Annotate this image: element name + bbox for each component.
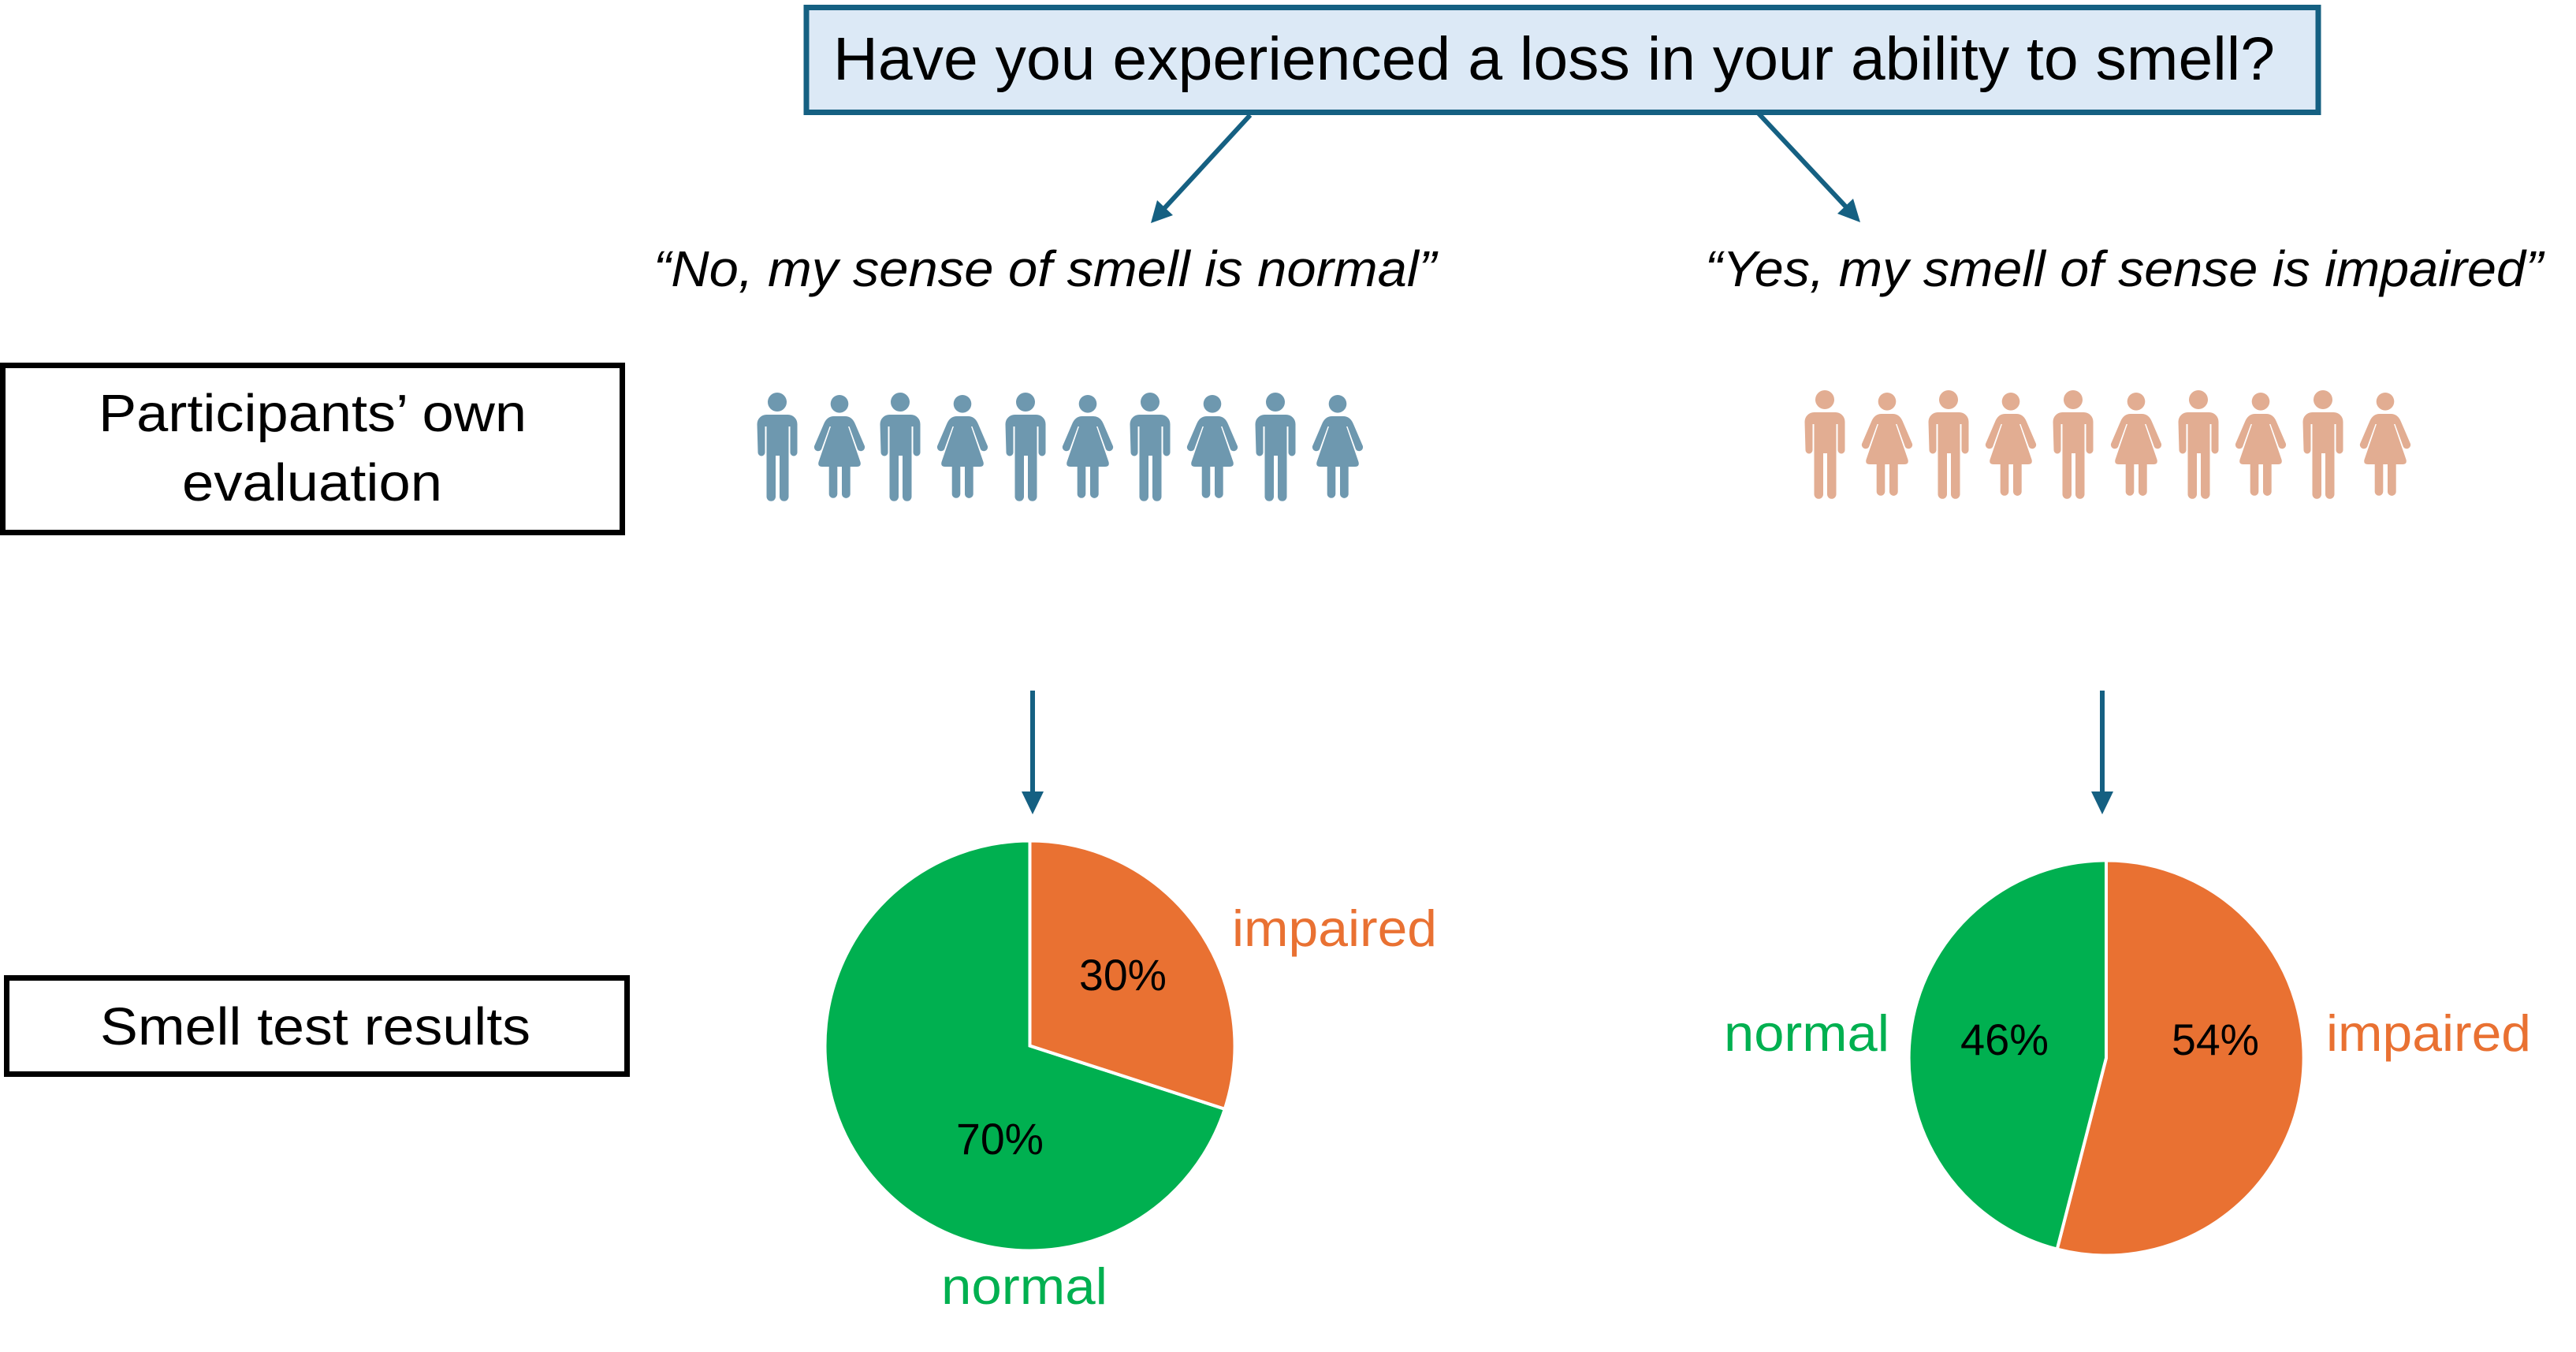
label: impaired: impaired [1232, 899, 1437, 957]
value: 54%: 54% [2172, 1015, 2259, 1064]
arrow: down to left pie [1022, 691, 1044, 814]
row label: participants' own evaluation [3, 366, 623, 533]
quote: yes, impaired: “Yes, my smell of sense is impaired” [1705, 240, 2545, 297]
row label: smell test results [6, 978, 627, 1074]
question box [806, 8, 2318, 112]
row label: participants' own evaluation: evaluation [182, 453, 442, 512]
arrow: question to "no" answer [1151, 115, 1250, 223]
label: impaired: impaired [2326, 1004, 2531, 1062]
value: 30%: 30% [1079, 950, 1167, 1000]
value: 70%: 70% [956, 1114, 1044, 1164]
question box: Have you experienced a loss in your ability to smell? [833, 25, 2275, 93]
label: normal: normal [1724, 1004, 1889, 1062]
row label: participants' own evaluation: Participants’ own [99, 384, 527, 443]
arrow: question to "yes" answer [1759, 114, 1860, 222]
row label: smell test results: Smell test results [100, 997, 530, 1056]
people icons: normal self-evaluation group [757, 393, 1363, 501]
people icons: impaired self-evaluation group [1805, 390, 2410, 499]
value: 46%: 46% [1960, 1015, 2049, 1064]
quote: no, normal: “No, my sense of smell is normal” [653, 240, 1439, 297]
pie chart: normal self-evaluation [825, 840, 1437, 1315]
label: normal: normal [941, 1257, 1107, 1315]
pie chart: impaired self-evaluation [1724, 860, 2531, 1255]
arrow: down to right pie [2091, 691, 2113, 814]
